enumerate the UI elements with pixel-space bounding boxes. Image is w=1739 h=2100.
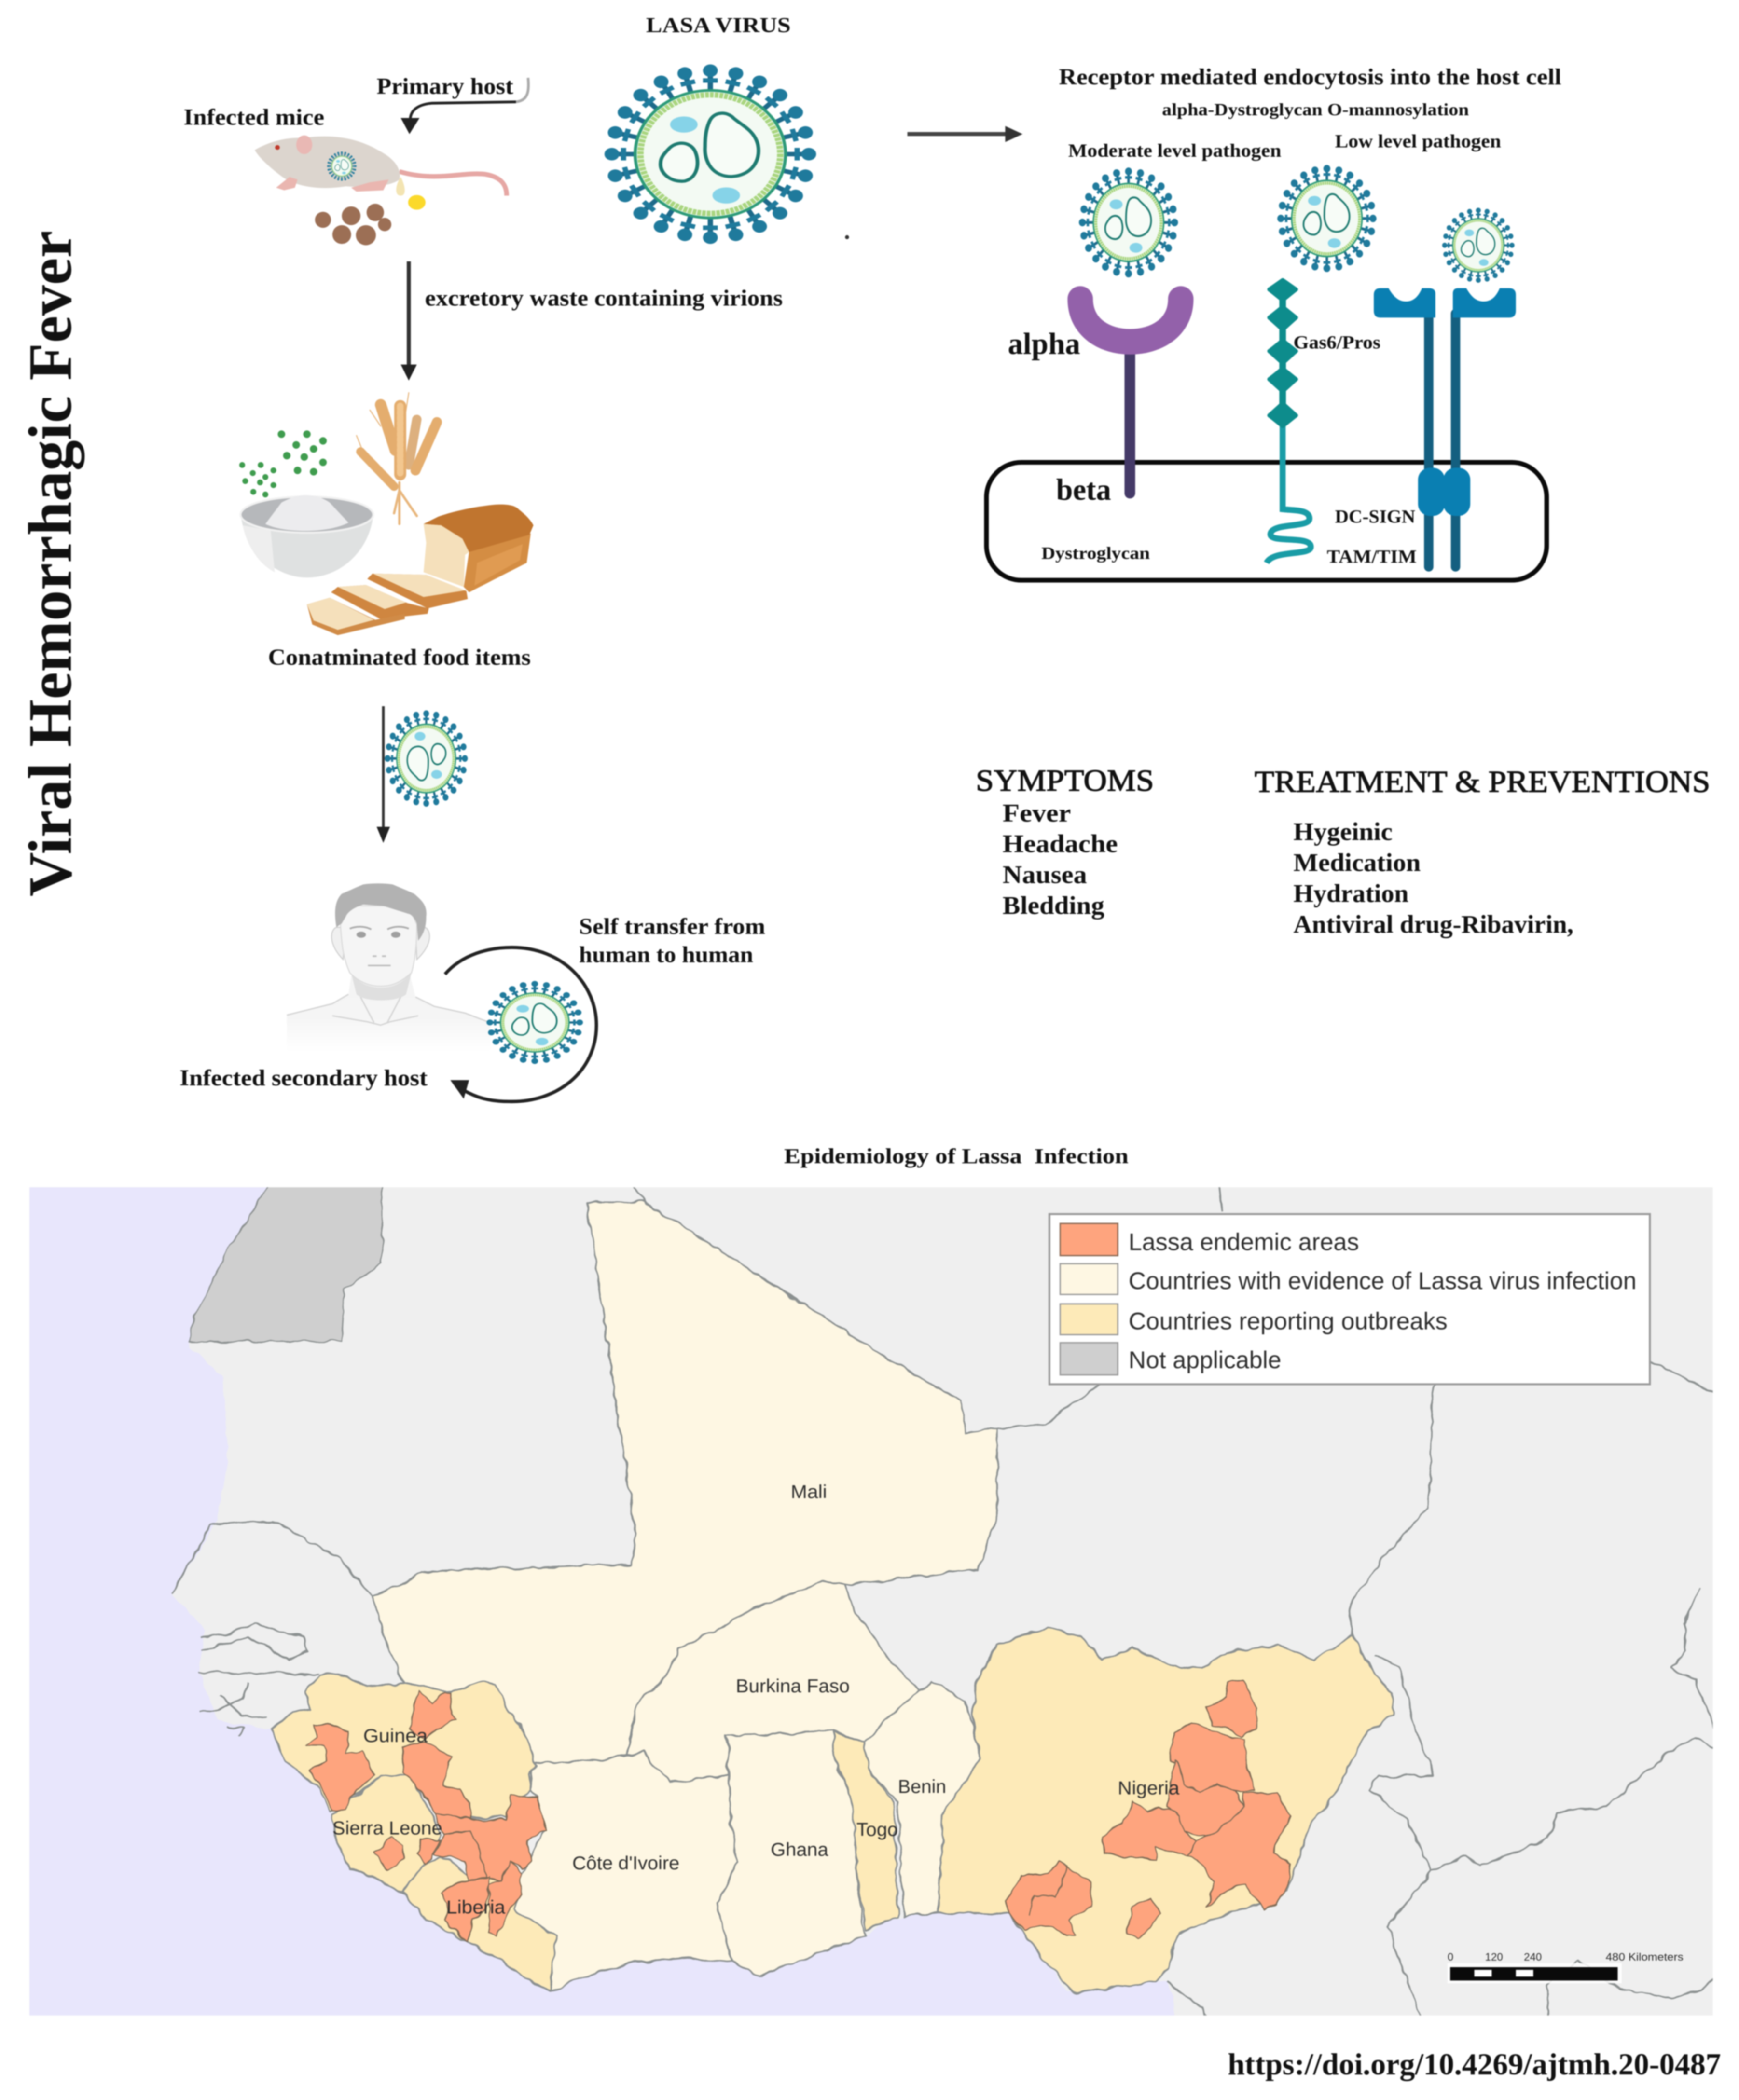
country: Mali — [373, 1202, 997, 1762]
scale bar: 480 Kilometers — [1606, 1951, 1684, 1963]
heading: receptor mediated endocytosis: Receptor mediated endocytosis into the host cell — [1059, 65, 1561, 90]
icon: virus over Gas6 — [1277, 165, 1377, 272]
label: self transfer: Self transfer from — [579, 914, 765, 939]
label: self transfer: human to human — [579, 942, 753, 967]
list: symptoms: Headache — [1003, 830, 1118, 858]
map country labels: Côte d'Ivoire — [572, 1853, 679, 1874]
label: infected secondary host: Infected secondary host — [179, 1066, 428, 1091]
cell membrane box — [986, 462, 1546, 580]
map country labels: Togo — [856, 1819, 898, 1840]
endemic areas: Guinea Sierra Leone Liberia — [307, 1691, 546, 1942]
panel: transmission cycle — [179, 13, 816, 1101]
country: Sierra Leone — [332, 1775, 441, 1892]
country: Benin — [865, 1682, 981, 1916]
icon: large Lassa virus particle — [605, 64, 816, 244]
icon: contaminated food — [239, 393, 534, 635]
scale bar — [1448, 1951, 1684, 1983]
icon: infected mouse with droppings — [255, 136, 507, 245]
endemic areas: Nigeria — [1007, 1679, 1291, 1939]
icon: virus inside circular arrow — [486, 981, 583, 1064]
legend item: evidence of infection: Countries with evidence of Lassa virus infection — [1129, 1267, 1637, 1294]
arrow: primary host to mouse — [401, 78, 528, 134]
country: Togo — [834, 1733, 898, 1930]
receptor: dystroglycan — [1080, 299, 1181, 493]
label: excretory waste: excretory waste containing virions — [425, 286, 783, 311]
map ocean — [0, 1166, 1174, 2037]
label: self transfer — [579, 914, 765, 967]
map country labels: Nigeria — [1118, 1778, 1180, 1798]
label: DC-SIGN: DC-SIGN — [1335, 506, 1415, 527]
label: Dystroglycan: Dystroglycan — [1041, 543, 1150, 563]
map country labels: Burkina Faso — [736, 1676, 850, 1697]
label: infected mice: Infected mice — [184, 105, 324, 130]
country: Guinea — [272, 1675, 536, 1817]
map border lines — [172, 1166, 1722, 2023]
scale bar: 240 — [1524, 1951, 1542, 1963]
scale bar: 120 — [1485, 1951, 1503, 1963]
chart: map of West Africa — [0, 1166, 1739, 2037]
stray dot — [845, 235, 849, 239]
arrow: circular human to human — [445, 947, 596, 1101]
country: Liberia — [402, 1856, 556, 1991]
country: Western Sahara not applicable — [189, 1166, 382, 1341]
icon: infected human — [287, 883, 491, 1052]
heading: symptoms: SYMPTOMS — [976, 763, 1154, 797]
icon: small virus over DC-SIGN — [1442, 208, 1515, 283]
panel: receptor mediated endocytosis — [986, 65, 1561, 580]
map regions with irregular borders — [0, 1166, 1722, 2037]
list: symptoms — [1003, 799, 1118, 920]
source DOI: https://doi.org/10.4269/ajtmh.20-0487 — [1228, 2047, 1721, 2081]
text block: symptoms — [976, 763, 1154, 920]
icon: virus over dystroglycan — [1079, 167, 1178, 277]
label: Gas6/Pros: Gas6/Pros — [1293, 332, 1380, 353]
country: Ghana — [717, 1731, 866, 1975]
country: Cote d'Ivoire — [515, 1753, 737, 1991]
legend item: not applicable: Not applicable — [1129, 1346, 1281, 1373]
label: moderate level pathogen: Moderate level pathogen — [1068, 140, 1282, 161]
icon: virus beside arrow — [385, 710, 468, 807]
map country labels: Benin — [898, 1777, 946, 1798]
label: primary host: Primary host — [377, 74, 513, 99]
subheading: O-mannosylation: alpha-Dystroglycan O-mannosylation — [1162, 100, 1469, 119]
map country labels: Guinea — [363, 1726, 428, 1746]
legend item: not applicable — [1060, 1343, 1281, 1375]
list: treatments — [1293, 818, 1573, 938]
list: treatments: Antiviral drug-Ribavirin, — [1293, 910, 1573, 938]
map country labels: Sierra Leone — [332, 1818, 442, 1839]
map land base — [172, 1187, 1713, 2016]
list: treatments: Medication — [1293, 849, 1421, 877]
arrow: mouse to food — [401, 261, 417, 381]
list: treatments: Hygeinic — [1293, 818, 1393, 846]
legend item: Lassa endemic areas — [1060, 1223, 1359, 1256]
map geography clipped to frame — [0, 1166, 1739, 2037]
legend item: reporting outbreaks: Countries reporting outbreaks — [1129, 1308, 1448, 1335]
map country labels: Mali — [791, 1482, 827, 1502]
scale bar: 0 — [1448, 1951, 1453, 1963]
legend item: Lassa endemic areas: Lassa endemic areas — [1129, 1229, 1359, 1256]
heading: epidemiology: Epidemiology of Lassa Infection — [784, 1144, 1129, 1168]
arrow: virus to receptor panel — [907, 126, 1022, 142]
country: Burkina Faso — [627, 1581, 925, 1782]
label: beta: beta — [1056, 472, 1111, 507]
arrow: food to human — [377, 706, 390, 843]
map country labels: Liberia — [446, 1897, 506, 1918]
list: symptoms: Bledding — [1003, 892, 1104, 920]
heading: Lasa virus: LASA VIRUS — [646, 13, 791, 37]
label: alpha: alpha — [1008, 326, 1080, 360]
label: low level pathogen: Low level pathogen — [1335, 131, 1501, 152]
legend — [1049, 1214, 1650, 1384]
list: treatments: Hydration — [1293, 879, 1408, 907]
text block: treatment and preventions — [1255, 765, 1710, 938]
list: symptoms: Fever — [1003, 799, 1071, 827]
receptor: DC-SIGN TAM TIM — [1374, 288, 1516, 567]
map country labels — [332, 1482, 1180, 1918]
label: TAM/TIM: TAM/TIM — [1327, 547, 1417, 567]
label: contaminated food items: Conatminated food items — [268, 645, 531, 670]
list: symptoms: Nausea — [1003, 861, 1087, 889]
receptor: Gas6 Pros — [1267, 280, 1311, 563]
heading: treatment and preventions: TREATMENT & PREVENTIONS — [1255, 765, 1710, 799]
map country labels: Ghana — [771, 1839, 828, 1860]
title: Viral Hemorrhagic Fever: Viral Hemorrhagic Fever — [16, 231, 84, 896]
country: Nigeria — [938, 1628, 1393, 1992]
